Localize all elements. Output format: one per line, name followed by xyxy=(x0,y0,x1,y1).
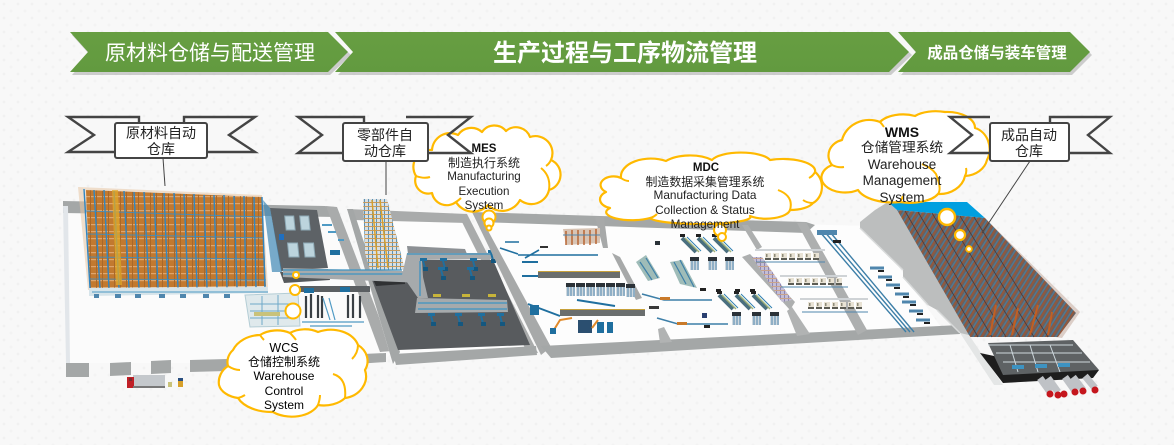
ribbon label: finished goods warehouse xyxy=(950,117,1110,161)
cloud callout: WMS: 仓储管理系统 xyxy=(861,140,943,155)
cloud callout: WCS: Control xyxy=(265,384,303,398)
cloud callout: WCS: System xyxy=(264,398,304,412)
cloud callout: WMS xyxy=(821,111,990,252)
ribbon label: raw material warehouse: 原材料自动 xyxy=(126,125,196,141)
cloud callout: MDC: MDC xyxy=(693,162,719,174)
storage rack: raw material warehouse xyxy=(78,187,268,296)
banner: finished goods and truck loading: 成品仓储与装车管理 xyxy=(927,43,1067,62)
cloud callout: MES: System xyxy=(465,199,503,212)
banner: raw material storage and delivery: 原材料仓储与配送管理 xyxy=(105,42,315,65)
leader line: parts warehouse xyxy=(385,161,387,195)
banner: production process and logistics: 生产过程与工序物流管理 xyxy=(493,40,757,67)
cloud callout: WMS: Management xyxy=(863,173,942,188)
banner: raw material storage and delivery xyxy=(70,32,351,75)
cloud callout: WMS: Warehouse xyxy=(868,157,936,172)
cloud callout: WMS: WMS xyxy=(885,124,919,140)
ribbon label: finished goods warehouse: 仓库 xyxy=(1015,143,1043,159)
cloud callout: MES: Execution xyxy=(459,185,509,198)
production equipment: second section xyxy=(636,234,779,328)
cloud callout: MES: MES xyxy=(472,143,497,155)
banner: production process and logistics xyxy=(335,32,912,75)
ribbon label: parts warehouse xyxy=(298,117,471,161)
cloud callout: MDC: Collection & Status xyxy=(655,203,755,217)
production equipment: diagonal conveyors xyxy=(817,230,930,332)
finished goods dock xyxy=(960,333,1099,385)
building: raw material hall walls xyxy=(63,201,392,377)
cloud callout: WCS: Warehouse xyxy=(254,369,315,383)
cloud callout: MES: Manufacturing xyxy=(447,170,521,183)
cloud callout: WCS: 仓储控制系统 xyxy=(248,354,320,369)
sorting platform xyxy=(263,200,330,283)
cloud callout: MDC: Manufacturing Data xyxy=(654,188,757,202)
cloud callout: MES: 制造执行系统 xyxy=(448,156,520,170)
building: production hall xyxy=(472,202,970,358)
cloud callout: WMS: System xyxy=(879,190,925,205)
warehouse control equipment xyxy=(245,225,370,327)
truck at dock xyxy=(127,375,183,388)
trucks at finished goods dock xyxy=(1040,376,1098,398)
banner: finished goods and truck loading xyxy=(898,32,1092,75)
cloud callout: WCS: WCS xyxy=(269,341,299,355)
production equipment: press rows xyxy=(752,250,868,312)
leader line: finished goods warehouse xyxy=(982,161,1030,233)
leader line: raw material warehouse xyxy=(163,158,165,186)
finished goods storage rack xyxy=(888,202,1080,338)
ribbon label: parts warehouse: 动仓库 xyxy=(364,143,406,159)
conveyor line: parts hall xyxy=(283,246,508,326)
production equipment: first section xyxy=(500,228,645,334)
cloud callout: MDC xyxy=(600,153,822,241)
cloud callout: MDC: 制造数据采集管理系统 xyxy=(646,175,765,189)
ribbon label: parts warehouse: 零部件自 xyxy=(357,127,413,143)
storage rack: parts warehouse xyxy=(363,199,405,270)
cloud callout: WCS xyxy=(219,272,368,417)
ribbon label: raw material warehouse: 仓库 xyxy=(147,141,175,157)
cloud callout: MES xyxy=(413,125,561,230)
cloud callout: MDC: Management xyxy=(671,217,740,231)
building: parts hall xyxy=(347,209,538,365)
ribbon label: finished goods warehouse: 成品自动 xyxy=(1001,127,1057,143)
ribbon label: raw material warehouse xyxy=(68,117,255,158)
